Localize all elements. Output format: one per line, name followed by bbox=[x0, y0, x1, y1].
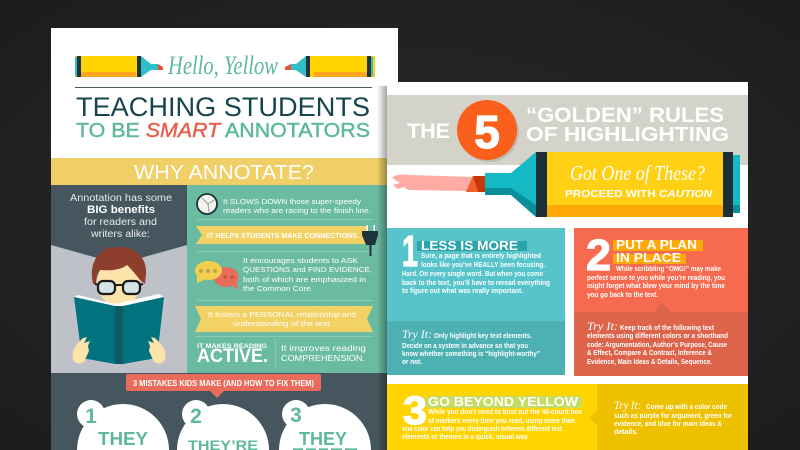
icon: right highlighter bbox=[285, 56, 375, 77]
highlighter caption: PROCEED WITH CAUTION bbox=[565, 188, 712, 200]
panel: rule 2: PUT A PLAN bbox=[616, 237, 697, 252]
benefit: ask questions: It encourages students to ASK bbox=[243, 256, 358, 265]
mistake 2: 2 bbox=[190, 405, 202, 428]
header band: golden rules: “GOLDEN” RULES bbox=[526, 104, 724, 127]
header band: golden rules: THE bbox=[407, 120, 450, 143]
subtitle: TO BE SMART ANNOTATORS bbox=[76, 120, 370, 142]
panel: rule 3 bbox=[387, 384, 748, 450]
mistake 2 bbox=[177, 400, 269, 450]
panel: rule 2: IN PLACE bbox=[616, 250, 681, 265]
panel: rule 1: or not. bbox=[402, 359, 422, 366]
panel: rule 1: looks like you’ve REALLY been focusing. bbox=[421, 262, 545, 269]
panel: rule 1: Sure, a page that is entirely highlighted bbox=[421, 253, 541, 260]
panel: rule 2: code: Argumentation, Author’s Purpose, Cause bbox=[587, 342, 727, 349]
panel: rule 2: 2 bbox=[586, 231, 611, 280]
mistake 1 bbox=[77, 400, 169, 450]
benefit: ask questions: both of which are emphasized in bbox=[243, 275, 366, 284]
panel: rule 3: evidence, and blue for main ideas & bbox=[614, 421, 722, 428]
panel: annotation benefits intro: Annotation has some bbox=[70, 192, 172, 204]
panel: rule 2 bbox=[574, 228, 748, 376]
benefit: active: ACTIVE. bbox=[197, 346, 268, 367]
panel: rule 1: Hard. On every single word. But when you come bbox=[402, 271, 543, 278]
panel: rule 3: Try It: bbox=[614, 398, 641, 412]
mistake 3: THEY bbox=[299, 429, 347, 449]
panel: rule 1: Try It: bbox=[402, 327, 432, 341]
panel: rule 3: details. bbox=[614, 429, 638, 436]
panel: rule 3: 3 bbox=[403, 389, 427, 433]
panel: rule 3: such as purple for argument, green for bbox=[614, 413, 732, 420]
benefit: comprehension: It improves reading bbox=[281, 343, 366, 353]
panel: rule 1: Decide on a system in advance so that you bbox=[402, 343, 528, 350]
panel: right poster bbox=[387, 82, 748, 450]
panel: rule 2: Keep track of the following text bbox=[620, 325, 715, 332]
icon: plug bbox=[362, 225, 378, 256]
panel: rule 3: of markers every time you read, using more than bbox=[428, 418, 575, 425]
ribbon: personal relationship bbox=[195, 306, 373, 332]
panel: rule 1: back to the text, you’ll have to reread everything bbox=[402, 280, 550, 287]
benefit: active: IT MAKES READING bbox=[197, 343, 267, 350]
header band: golden rules: OF HIGHLIGHTING bbox=[526, 124, 729, 146]
header band: golden rules bbox=[387, 95, 748, 165]
icon: speech bubbles bbox=[195, 261, 238, 290]
ribbon: makes connections: IT HELPS STUDENTS MAKE CONNECTIONS. bbox=[207, 231, 359, 240]
panel: rule 1: 1 bbox=[402, 227, 418, 276]
callout: mistakes banner: 3 MISTAKES KIDS MAKE (AND HOW TO FIX THEM) bbox=[133, 378, 314, 388]
benefit: ask questions bbox=[243, 256, 372, 293]
ribbon: personal relationship: understanding of the text. bbox=[233, 319, 332, 328]
panel: rule 1: Only highlight key text elements. bbox=[434, 333, 532, 340]
benefit: slows down bbox=[223, 197, 371, 215]
panel: rule 2: might forget what blew your mind by the time bbox=[587, 283, 725, 290]
title: TEACHING STUDENTS bbox=[76, 92, 370, 122]
panel: rule 2: Try It: bbox=[587, 319, 618, 333]
icon: clock bbox=[197, 194, 217, 214]
panel: rule 1: to figure out what was really important. bbox=[402, 288, 523, 295]
benefit: ask questions: the Common Core. bbox=[243, 284, 313, 293]
benefit: comprehension bbox=[281, 343, 366, 363]
mistake 3 bbox=[279, 400, 371, 450]
benefit: slows down: readers who are racing to the finish line. bbox=[223, 206, 371, 215]
mistake 3: 3 bbox=[290, 404, 302, 427]
highlighter caption: Got One of These? bbox=[570, 161, 705, 185]
callout: mistakes banner bbox=[126, 374, 321, 398]
panel: rule 1: know whether something is “highlight-worthy” bbox=[402, 351, 540, 358]
ribbon: makes connections bbox=[196, 226, 368, 244]
icon: large highlighter bbox=[392, 152, 740, 217]
panel: annotation benefits intro: for readers and bbox=[84, 216, 157, 228]
panel: rule 1: LESS IS MORE bbox=[421, 238, 518, 253]
panel: rule 2: perfect sense to you while you’re reading, you bbox=[587, 275, 725, 282]
panel: rule 3: elements or themes in a quick, visual way. bbox=[402, 434, 529, 441]
script heading: Hello, Yellow bbox=[167, 51, 279, 80]
panel: annotation benefits intro: BIG benefits bbox=[87, 204, 155, 216]
benefit: ask questions: QUESTIONS and FIND EVIDENCE, bbox=[243, 265, 372, 274]
panel: three mistakes bbox=[51, 373, 398, 450]
highlighter caption bbox=[565, 161, 712, 200]
panel: rule 3: Come up with a color code bbox=[646, 404, 727, 411]
header band: golden rules: 5 bbox=[474, 106, 500, 158]
illustration: student reading a book bbox=[73, 247, 165, 364]
panel: rule 3: GO BEYOND YELLOW bbox=[428, 394, 579, 409]
section band: why annotate bbox=[51, 158, 398, 185]
panel: annotation benefits list bbox=[187, 185, 398, 373]
panel: annotation benefits intro: writers alike: bbox=[90, 228, 150, 240]
ribbon: personal relationship: It fosters a PERSONAL relationship and bbox=[208, 310, 356, 319]
section band: why annotate: WHY ANNOTATE? bbox=[134, 162, 314, 184]
benefit: slows down: It SLOWS DOWN those super-speedy bbox=[223, 197, 361, 206]
panel: annotation benefits intro bbox=[51, 185, 187, 373]
icon: left highlighter bbox=[75, 56, 163, 77]
panel: rule 3: one color can help you distinguish between different text bbox=[402, 426, 563, 433]
panel: rule 2: While scribbling “OMG!” may make bbox=[616, 266, 721, 273]
panel: rule 3: While you don’t need to bust out the 48-count box bbox=[428, 409, 582, 416]
panel: rule 2: you go back to the text. bbox=[587, 292, 658, 299]
panel: rule 2: & Effect, Compare & Contrast, Inference & bbox=[587, 350, 712, 357]
panel: rule 2: elements using different colors or a shorthand bbox=[587, 333, 728, 340]
mistake 1: 1 bbox=[85, 405, 97, 428]
benefit: comprehension: COMPREHENSION. bbox=[281, 353, 365, 363]
mistake 1: THEY bbox=[98, 429, 148, 449]
panel: rule 1 bbox=[387, 227, 565, 375]
panel: rule 2: Evidence, Main Ideas & Details, Sequence. bbox=[587, 359, 712, 366]
panel: left poster bbox=[51, 28, 398, 450]
